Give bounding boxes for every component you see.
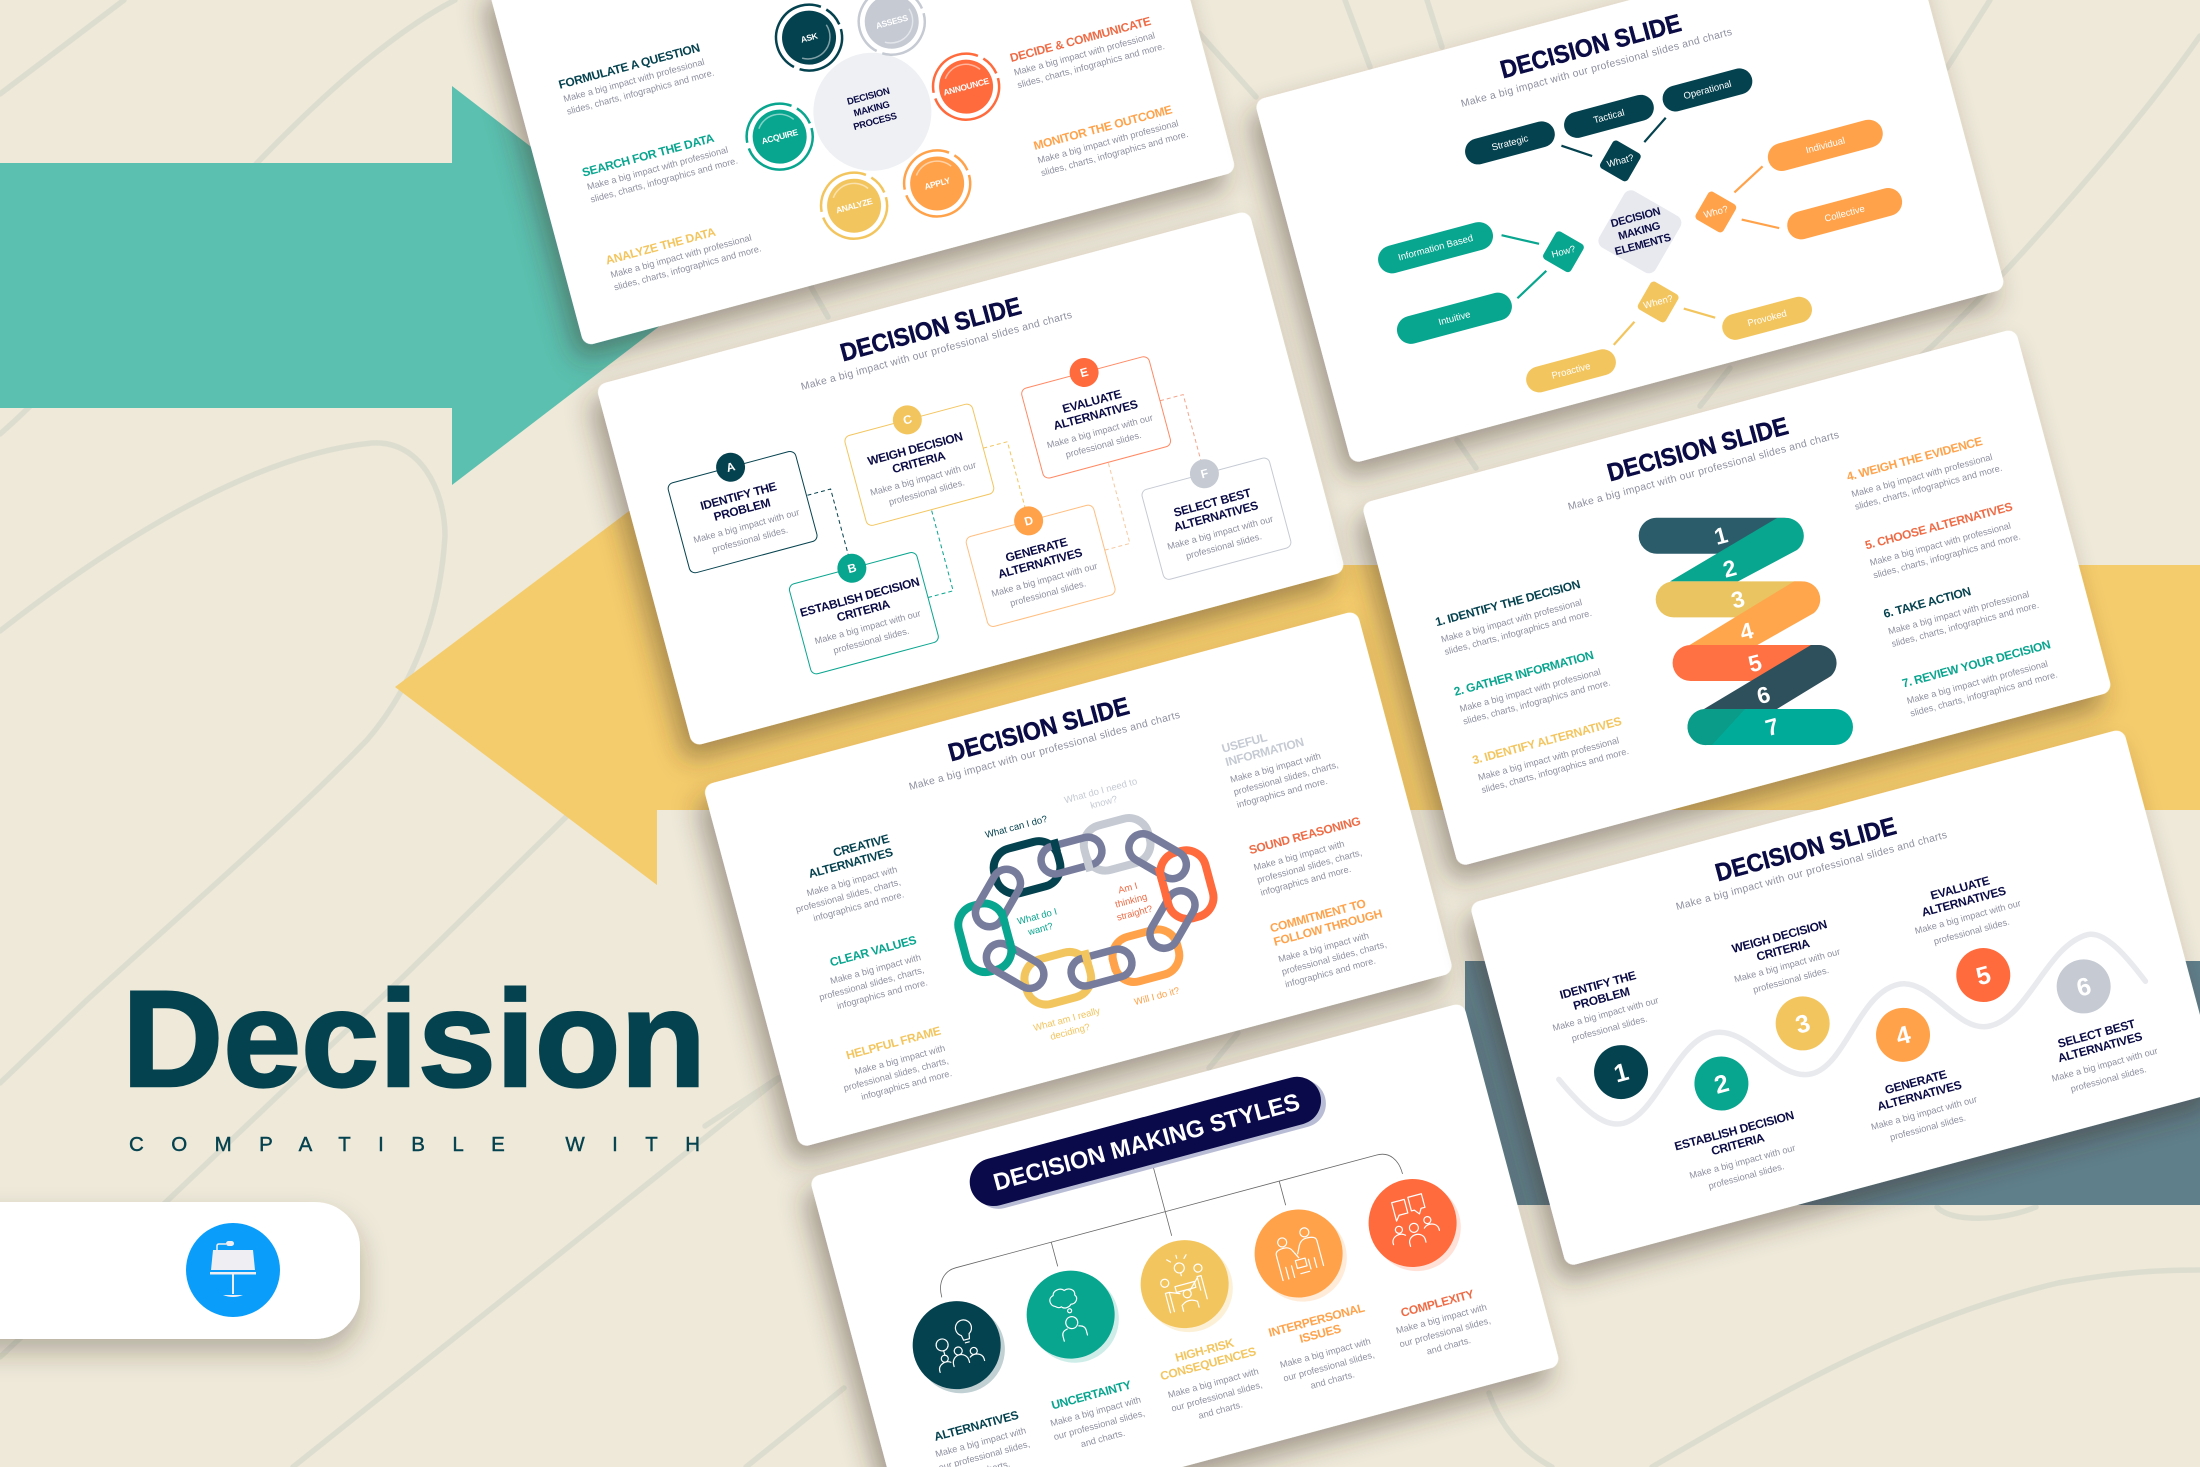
step 1 (1543, 964, 1681, 1112)
pill: provoked: Provoked (1746, 308, 1788, 329)
pill: provoked (1719, 294, 1815, 343)
pill: information based (1375, 219, 1496, 277)
step 5: ALTERNATIVES (1920, 884, 2008, 920)
step 3: 3 (1793, 1009, 1813, 1040)
numbers: 1 (1711, 521, 1731, 550)
card: generate alternatives: D (1023, 513, 1035, 529)
text: decide and communicate (1008, 12, 1166, 90)
step 3: professional slides. (1752, 965, 1830, 995)
node: who (1688, 184, 1744, 240)
chain labels: know? (1089, 794, 1119, 812)
card: evaluate alternatives: E (1079, 365, 1090, 380)
text: step 1 (1434, 576, 1593, 657)
numbers: 3 (1728, 585, 1747, 614)
node: who: Who? (1703, 204, 1729, 221)
text: decide and communicate: DECIDE & COMMUNICATE (1008, 14, 1153, 65)
step 4: 4 (1893, 1020, 1914, 1051)
style: alternatives: Make a big impact with (934, 1425, 1027, 1459)
text: analyze the data: Make a big impact with professional (609, 233, 753, 280)
step 6: 6 (2074, 972, 2094, 1003)
step 6 (2024, 946, 2163, 1098)
step 3: Make a big impact with our (1733, 946, 1841, 984)
text: commitment to follow through: FOLLOW THROUGH (1272, 906, 1384, 949)
pill: operational (1660, 66, 1755, 114)
text: creative alternatives: CREATIVE (832, 831, 891, 860)
text: step 7: 7. REVIEW YOUR DECISION (1901, 637, 2052, 690)
subheading: Make a big impact with our professional slides and charts (1567, 430, 1840, 513)
node: how: How? (1550, 244, 1577, 261)
text: step 5: Make a big impact with professional (1869, 520, 2012, 568)
card: generate alternatives: Make a big impact with our (990, 561, 1098, 599)
zigzag ribbon (1639, 518, 1853, 745)
text: commitment to follow through: infographics and more. (1284, 956, 1377, 989)
subtitle: compatible with: COMPATIBLE WITH (129, 1133, 700, 1156)
card: identify the problem (663, 436, 818, 574)
step 4: ALTERNATIVES (1876, 1078, 1963, 1114)
center: decision making process: DECISION (846, 86, 891, 108)
text: sound reasoning: Make a big impact with (1253, 839, 1345, 873)
pill: tactical (1561, 92, 1657, 141)
step 2 (1655, 1041, 1807, 1197)
center: decision making process: MAKING (853, 99, 891, 119)
node: ask (769, 0, 849, 78)
center: decision making process (800, 40, 945, 184)
text: search for the data (581, 127, 739, 205)
card: identify the problem: IDENTIFY THE (699, 479, 778, 513)
card: select best alternatives (1137, 443, 1292, 581)
style: uncertainty: and charts. (1080, 1428, 1126, 1449)
panel: lettered process slide (596, 210, 1346, 747)
connectors (1482, 97, 1797, 366)
node: apply: APPLY (923, 175, 952, 192)
step 3: CRITERIA (1755, 936, 1812, 964)
node: assess (851, 0, 932, 62)
style: uncertainty (1013, 1260, 1150, 1456)
panel: keynote badge (0, 1202, 360, 1339)
center: decision making elements (1584, 176, 1696, 288)
text: step 7: slides, charts, infographics and more. (1909, 669, 2059, 718)
step 6: Make a big impact with our (2051, 1046, 2159, 1084)
icon: people and ideas (929, 1317, 985, 1372)
center: decision making elements: ELEMENTS (1614, 232, 1672, 258)
card: evaluate alternatives: ALTERNATIVES (1052, 397, 1139, 433)
style: alternatives: ALTERNATIVES (933, 1408, 1020, 1444)
pill: information based: Information Based (1397, 233, 1474, 263)
style: high-risk consequences: HIGH-RISK (1174, 1336, 1236, 1365)
style: high-risk consequences: and charts. (1197, 1399, 1244, 1421)
card: generate alternatives (961, 490, 1116, 628)
node: acquire (739, 96, 820, 177)
step 6: SELECT BEST (2056, 1016, 2137, 1051)
card: select best alternatives: ALTERNATIVES (1172, 498, 1260, 534)
arrow: teal pointing right (0, 86, 712, 485)
icon: keynote (186, 1223, 280, 1317)
text: creative alternatives: ALTERNATIVES (807, 845, 894, 881)
card: establish decision criteria: Make a big impact with our (814, 608, 922, 646)
pill: intuitive: Intuitive (1437, 309, 1472, 328)
chain labels: What can I do? (984, 814, 1049, 841)
style: interpersonal issues: and charts. (1309, 1369, 1356, 1391)
numbers: 5 (1745, 649, 1765, 677)
text: analyze the data (604, 214, 762, 293)
chain labels: thinking (1114, 892, 1149, 911)
text: useful information (1220, 714, 1343, 810)
text: step 7 (1901, 637, 2059, 718)
subheading: Make a big impact with our professional slides and charts (1675, 830, 1948, 913)
style: high-risk consequences: Make a big impact with (1167, 1366, 1260, 1400)
node: what: What? (1606, 153, 1635, 170)
panel: chain slide (703, 610, 1454, 1148)
chain labels: What do I need to (1063, 776, 1138, 806)
card: select best alternatives: SELECT BEST (1172, 485, 1253, 520)
text: useful information: INFORMATION (1224, 735, 1305, 769)
text: sound reasoning (1247, 814, 1373, 898)
text: step 6: slides, charts, infographics and more. (1890, 600, 2040, 649)
card: select best alternatives: professional slides. (1185, 531, 1263, 561)
step 5: EVALUATE (1929, 873, 1991, 903)
chain (942, 800, 1230, 1023)
text: clear values (810, 933, 929, 1015)
pill: proactive: Proactive (1551, 361, 1592, 382)
text: creative alternatives: professional slides, charts, (795, 877, 902, 915)
text: step 5: 5. CHOOSE ALTERNATIVES (1864, 499, 2014, 552)
pill: tactical: Tactical (1592, 107, 1626, 126)
card: evaluate alternatives (1017, 341, 1172, 479)
text: creative alternatives: Make a big impact with (805, 864, 898, 898)
style: complexity: our professional slides, (1398, 1315, 1492, 1349)
pill: individual: Individual (1805, 135, 1846, 156)
pill: collective: Collective (1823, 204, 1866, 225)
dashed connectors (807, 395, 1217, 621)
node: ask: ASK (800, 30, 820, 45)
style: interpersonal issues: our professional slides, (1282, 1350, 1376, 1384)
step 4: Make a big impact with our (1870, 1094, 1978, 1132)
step 3: WEIGH DECISION (1730, 917, 1828, 956)
card: weigh decision criteria: CRITERIA (891, 448, 947, 476)
chain labels: Am I (1117, 881, 1139, 896)
node: assess: ASSESS (875, 12, 909, 31)
text: step 7: Make a big impact with professional (1906, 659, 2049, 706)
card: establish decision criteria: CRITERIA (835, 597, 892, 625)
card: establish decision criteria: professional slides. (832, 626, 910, 656)
pill: individual (1765, 117, 1886, 174)
panel: wave slide (1469, 728, 2200, 1267)
pill: strategic (1462, 118, 1558, 167)
heading pill: DECISION MAKING STYLES (991, 1089, 1303, 1197)
text: step 4: 4. WEIGH THE EVIDENCE (1845, 434, 1984, 484)
subheading: Make a big impact with our professional slides and charts (1460, 27, 1733, 110)
icon: thinking person (1047, 1285, 1087, 1342)
center: decision making elements: DECISION (1610, 205, 1662, 230)
step 1: professional slides. (1570, 1014, 1648, 1044)
text: commitment to follow through: professional slides, charts, (1281, 939, 1388, 977)
text: commitment to follow through: Make a big impact with (1277, 930, 1370, 964)
text: step 2: Make a big impact with professional (1459, 667, 1602, 714)
panel: decision making styles slide (809, 1002, 1561, 1467)
text: step 5: slides, charts, infographics and more. (1872, 531, 2022, 580)
card: establish decision criteria (784, 537, 940, 675)
icon: team celebrating (1155, 1250, 1212, 1315)
heading: DECISION SLIDE (837, 292, 1024, 367)
text: step 3: Make a big impact with professional (1477, 735, 1620, 783)
text: step 6: Make a big impact with professional (1887, 589, 2030, 636)
text: clear values: Make a big impact with (829, 952, 922, 986)
numbers: 7 (1763, 713, 1782, 741)
node: analyze: ANALYZE (835, 196, 874, 215)
card: weigh decision criteria: WEIGH DECISION (866, 429, 964, 468)
pill: strategic: Strategic (1491, 133, 1530, 154)
text: search for the data: slides, charts, infographics and more. (589, 155, 739, 205)
node: apply (897, 143, 978, 224)
numbers (1711, 521, 1782, 741)
step 4: GENERATE (1883, 1067, 1948, 1097)
pill: operational: Operational (1682, 79, 1733, 102)
chain labels: straight? (1116, 904, 1154, 924)
text: formulate a question: Make a big impact with professional (562, 57, 706, 104)
step 5 (1905, 867, 2043, 1015)
text: search for the data: SEARCH FOR THE DATA (581, 131, 716, 180)
chain labels: want? (1026, 921, 1054, 938)
chain labels: deciding? (1049, 1022, 1091, 1043)
node: when: When? (1642, 293, 1674, 312)
card: generate alternatives: GENERATE (1004, 535, 1069, 565)
step 2: Make a big impact with our (1688, 1143, 1796, 1181)
text: step 4: Make a big impact with professional (1850, 452, 1993, 499)
step 2: ESTABLISH DECISION (1673, 1108, 1795, 1154)
text: step 1: slides, charts, infographics and more. (1443, 608, 1593, 657)
style: complexity: and charts. (1425, 1335, 1472, 1357)
step 1: Make a big impact with our (1551, 995, 1660, 1033)
text: analyze the data: ANALYZE THE DATA (604, 225, 717, 268)
card: evaluate alternatives: EVALUATE (1061, 387, 1123, 416)
pill: collective (1784, 185, 1905, 242)
card: identify the problem: A (725, 459, 737, 475)
text: clear values: professional slides, charts, (818, 965, 925, 1002)
heading: DECISION SLIDE (945, 692, 1132, 767)
style: uncertainty: Make a big impact with (1049, 1395, 1142, 1428)
step 2: CRITERIA (1710, 1130, 1766, 1158)
text: helpful frame: infographics and more. (860, 1068, 953, 1102)
text: step 2 (1452, 646, 1611, 727)
step 6: professional slides. (2069, 1064, 2148, 1094)
card: evaluate alternatives: professional slides. (1064, 430, 1143, 460)
step 4 (1843, 995, 1982, 1147)
panel: decision elements slide (1254, 0, 2006, 464)
card: establish decision criteria: B (846, 560, 858, 576)
style: alternatives (898, 1291, 1037, 1467)
card: select best alternatives: Make a big impact with our (1166, 514, 1274, 552)
style: interpersonal issues: ISSUES (1298, 1321, 1343, 1346)
text: useful information: infographics and more. (1236, 776, 1329, 810)
text: step 1: Make a big impact with professional (1440, 597, 1583, 644)
node: announce: ANNOUNCE (942, 76, 991, 98)
style: interpersonal issues (1240, 1198, 1382, 1398)
text: monitor the outcome: MONITOR THE OUTCOME (1032, 102, 1174, 153)
card: generate alternatives: ALTERNATIVES (996, 545, 1084, 581)
style: interpersonal issues: INTERPERSONAL (1267, 1301, 1366, 1340)
node: analyze (814, 165, 894, 246)
text: search for the data: Make a big impact with professional (586, 145, 729, 192)
numbers: 2 (1720, 554, 1739, 583)
subheading: Make a big impact with our professional slides and charts (800, 310, 1073, 393)
chain labels: What am I really (1032, 1006, 1102, 1034)
step 5: 5 (1973, 961, 1994, 991)
style: complexity (1359, 1168, 1495, 1363)
panel: numbered zigzag slide (1361, 328, 2113, 867)
heading: DECISION SLIDE (1604, 412, 1791, 487)
style: high-risk consequences: our professional slides, (1170, 1380, 1264, 1414)
heading: DECISION SLIDE (1712, 812, 1899, 887)
step 5: professional slides. (1933, 917, 2011, 946)
text: step 2: slides, charts, infographics and more. (1462, 677, 1611, 727)
card: establish decision criteria: ESTABLISH DECISION (798, 575, 921, 620)
node: when (1630, 274, 1686, 330)
style: complexity: COMPLEXITY (1399, 1287, 1476, 1320)
heading: DECISION SLIDE (1497, 9, 1684, 84)
text: step 3: slides, charts, infographics and more. (1480, 746, 1630, 795)
node: announce (926, 46, 1007, 127)
icon: group with speech bubbles (1383, 1192, 1441, 1250)
text: formulate a question: FORMULATE A QUESTION (557, 41, 701, 92)
text: creative alternatives: infographics and more. (812, 889, 905, 923)
text: clear values: infographics and more. (836, 977, 929, 1011)
pill: intuitive (1394, 289, 1515, 347)
style: complexity: Make a big impact with (1395, 1302, 1488, 1336)
icon: two people (1271, 1225, 1325, 1281)
wave line (1558, 921, 2146, 1137)
style: high-risk consequences: CONSEQUENCES (1159, 1344, 1258, 1383)
text: commitment to follow through: COMMITMENT TO (1268, 896, 1367, 935)
center: decision making process: PROCESS (852, 111, 898, 133)
step 3 (1725, 916, 1862, 1064)
step 2: professional slides. (1707, 1161, 1785, 1191)
text: formulate a question (557, 39, 715, 117)
text: step 2: 2. GATHER INFORMATION (1452, 648, 1595, 699)
tree connector (923, 1102, 1403, 1297)
subheading: Make a big impact with our professional slides and charts (908, 710, 1181, 793)
text: monitor the outcome (1032, 100, 1189, 178)
card: weigh decision criteria: C (901, 412, 914, 428)
step 1: PROBLEM (1572, 984, 1631, 1013)
card: weigh decision criteria: Make a big impact with our (869, 460, 977, 498)
text: helpful frame: Make a big impact with (853, 1043, 946, 1077)
text: step 1: 1. IDENTIFY THE DECISION (1434, 577, 1582, 629)
text: monitor the outcome: slides, charts, infographics and more. (1040, 129, 1189, 178)
text: step 6 (1882, 568, 2040, 649)
pill: proactive (1523, 346, 1619, 395)
card: identify the problem: Make a big impact with our (692, 507, 800, 545)
style: uncertainty: our professional slides, (1053, 1408, 1146, 1442)
text: useful information: professional slides, charts, (1232, 760, 1340, 797)
text: creative alternatives (782, 831, 905, 927)
style: uncertainty: UNCERTAINTY (1050, 1378, 1133, 1412)
text: helpful frame: HELPFUL FRAME (845, 1024, 942, 1062)
node: acquire: ACQUIRE (760, 127, 799, 146)
text: formulate a question: slides, charts, infographics and more. (566, 68, 715, 117)
style: interpersonal issues: Make a big impact with (1279, 1336, 1372, 1370)
arrow: yellow pointing left (395, 490, 2200, 885)
text: clear values: CLEAR VALUES (828, 933, 918, 969)
card: weigh decision criteria (840, 389, 995, 527)
step 6: ALTERNATIVES (2056, 1029, 2144, 1065)
card: generate alternatives: professional slides. (1009, 578, 1087, 608)
title: Decision: Decision (122, 963, 706, 1116)
step 4: professional slides. (1889, 1113, 1967, 1143)
text: sound reasoning: infographics and more. (1259, 864, 1352, 898)
text: sound reasoning: professional slides, charts, (1256, 847, 1363, 885)
text: commitment to follow through (1268, 893, 1394, 989)
step 1: IDENTIFY THE (1558, 968, 1638, 1002)
step 2: 2 (1711, 1069, 1732, 1100)
text: step 3 (1471, 714, 1631, 795)
text: helpful frame (834, 1024, 953, 1106)
numbers: 6 (1754, 681, 1773, 709)
text: step 3: 3. IDENTIFY ALTERNATIVES (1471, 714, 1623, 767)
card: weigh decision criteria: professional slides. (888, 477, 966, 507)
card: identify the problem: PROBLEM (712, 495, 772, 524)
node: what (1593, 133, 1648, 189)
style: high-risk consequences (1128, 1228, 1270, 1428)
text: step 6: 6. TAKE ACTION (1882, 584, 1972, 621)
text: step 4 (1845, 431, 2003, 512)
chain labels (977, 776, 1197, 1047)
chain labels: Will I do it? (1133, 985, 1181, 1008)
text: decide and communicate: Make a big impact with professional (1013, 30, 1156, 78)
panel: decision making process slide (488, 0, 1236, 346)
text: step 5 (1864, 499, 2022, 580)
text: sound reasoning: SOUND REASONING (1247, 814, 1362, 857)
center: decision making elements: MAKING (1617, 220, 1661, 243)
step 1: 1 (1611, 1058, 1632, 1088)
card: evaluate alternatives: Make a big impact with our (1046, 412, 1154, 450)
card: identify the problem: professional slides. (711, 525, 789, 555)
text: useful information: Make a big impact with (1229, 751, 1322, 785)
text: useful information: USEFUL (1220, 730, 1268, 756)
card: select best alternatives: F (1199, 466, 1210, 481)
heading pill (964, 1070, 1331, 1215)
text: decide and communicate: slides, charts, infographics and more. (1016, 41, 1166, 90)
numbers: 4 (1737, 617, 1756, 645)
text: step 4: slides, charts, infographics and more. (1854, 463, 2003, 512)
step 5: Make a big impact with our (1914, 898, 2022, 936)
text: monitor the outcome: Make a big impact with professional (1036, 118, 1180, 165)
text: analyze the data: slides, charts, infographics and more. (613, 243, 762, 292)
text: helpful frame: professional slides, charts, (842, 1056, 950, 1093)
node: how (1536, 224, 1591, 279)
band: slate (1465, 961, 2200, 1205)
chain labels: What do I (1016, 906, 1058, 928)
